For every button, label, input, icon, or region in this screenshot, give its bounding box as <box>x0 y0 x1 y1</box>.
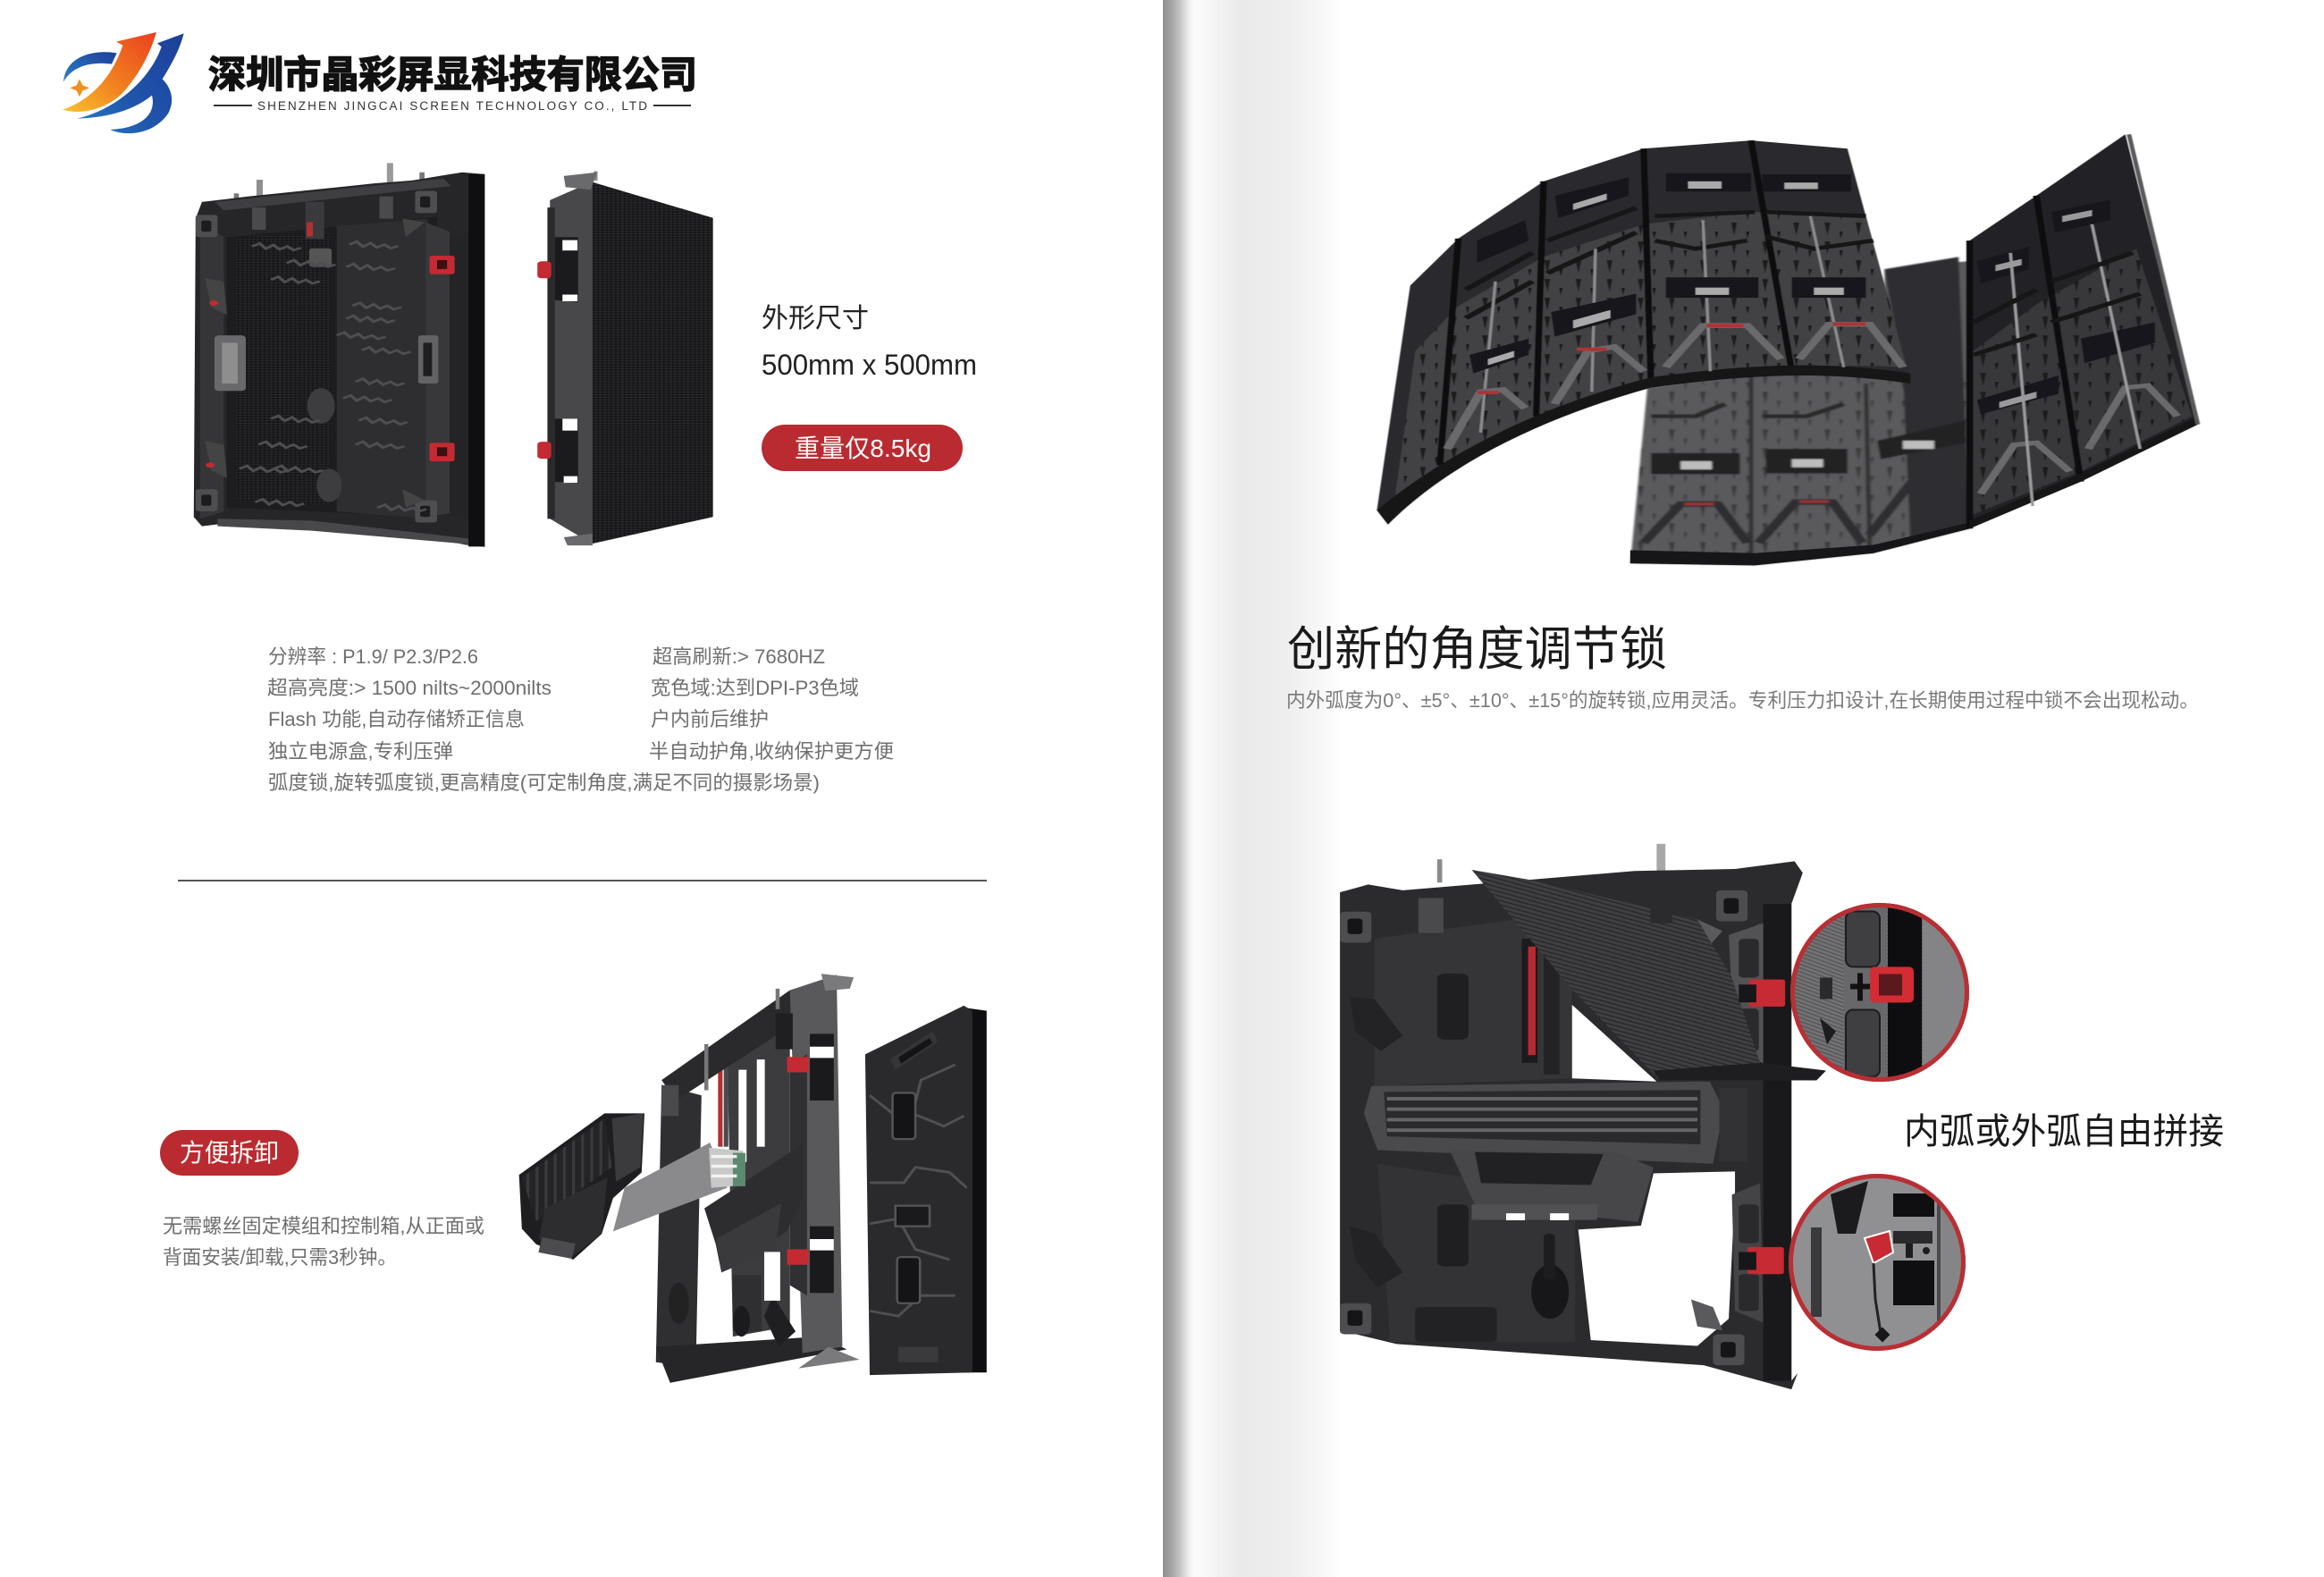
product: cabinet with sliding module <box>1340 844 1826 1389</box>
connector tube <box>613 1143 728 1231</box>
cross brace <box>704 1144 803 1272</box>
callout circle: upper lock <box>1790 903 1969 1082</box>
product: curved cabinets <box>1377 134 2198 565</box>
easy removal badge: 方便拆卸 <box>180 1139 279 1167</box>
control box <box>519 1113 644 1260</box>
right curved cabinets <box>1970 134 2198 528</box>
easy removal description <box>163 1215 484 1269</box>
sliding led module <box>1471 870 1826 1080</box>
handles <box>215 335 246 391</box>
company name: 深圳市晶彩屏显科技有限公司 <box>208 54 697 96</box>
red locks <box>430 256 455 461</box>
center curved cabinets <box>1630 257 1970 565</box>
specification list: 分辨率 : P1.9/ P2.3/P2.6 <box>268 645 478 668</box>
english company name: SHENZHEN JINGCAI SCREEN TECHNOLOGY CO., LTD <box>257 99 647 113</box>
specification list: 超高刷新:> 7680HZ <box>653 645 825 668</box>
red locks on frame <box>1747 980 1785 1274</box>
splicing caption: 内弧或外弧自由拼接 <box>1904 1112 2224 1151</box>
specification list: Flash 功能,自动存储矫正信息 <box>268 708 525 730</box>
easy removal description: 背面安装/卸载,只需3秒钟。 <box>163 1246 397 1269</box>
frame <box>1340 861 1803 1389</box>
bracket marks <box>240 241 426 511</box>
callout circle: lower lock <box>1789 1174 1966 1351</box>
company logo <box>63 32 697 133</box>
red side locks <box>537 261 552 459</box>
specification list: 户内前后维护 <box>651 708 769 730</box>
led panel <box>865 1006 987 1375</box>
spine shadow on right page <box>1163 0 1342 1577</box>
arches <box>1447 325 1903 449</box>
dimension value: 500mm x 500mm <box>762 349 977 381</box>
dimension label: 外形尺寸 <box>762 304 869 333</box>
specification list: 半自动护角,收纳保护更方便 <box>649 740 894 763</box>
specification list: 独立电源盒,专利压弹 <box>268 740 453 763</box>
upper handles <box>1469 173 1866 374</box>
section description: 内外弧度为0°、±5°、±10°、±15°的旋转锁,应用灵活。专利压力扣设计,在长期使用过程中锁不会出现松动。 <box>1286 689 2199 712</box>
specification list: 超高亮度:> 1500 nilts~2000nilts <box>267 677 552 699</box>
product: module side view <box>537 171 713 545</box>
frame <box>656 974 860 1383</box>
corner blocks <box>196 190 437 522</box>
easy removal description: 无需螺丝固定模组和控制箱,从正面或 <box>163 1215 484 1237</box>
section heading: 创新的角度调节锁 <box>1287 623 1667 676</box>
product: exploded module view <box>519 974 987 1383</box>
specification list: 弧度锁,旋转弧度锁,更高精度(可定制角度,满足不同的摄影场景) <box>268 772 820 794</box>
logo mark <box>63 32 184 133</box>
power box <box>1364 1082 1747 1222</box>
easy removal badge <box>160 1130 299 1176</box>
left curved cabinets <box>1377 140 1910 525</box>
product: module rear view <box>194 163 484 547</box>
red locks <box>787 1057 809 1265</box>
weight badge: 重量仅8.5kg <box>795 434 931 462</box>
weight badge <box>762 425 963 471</box>
specification list <box>267 645 894 794</box>
specification list: 宽色域:达到DPI-P3色域 <box>651 677 859 699</box>
